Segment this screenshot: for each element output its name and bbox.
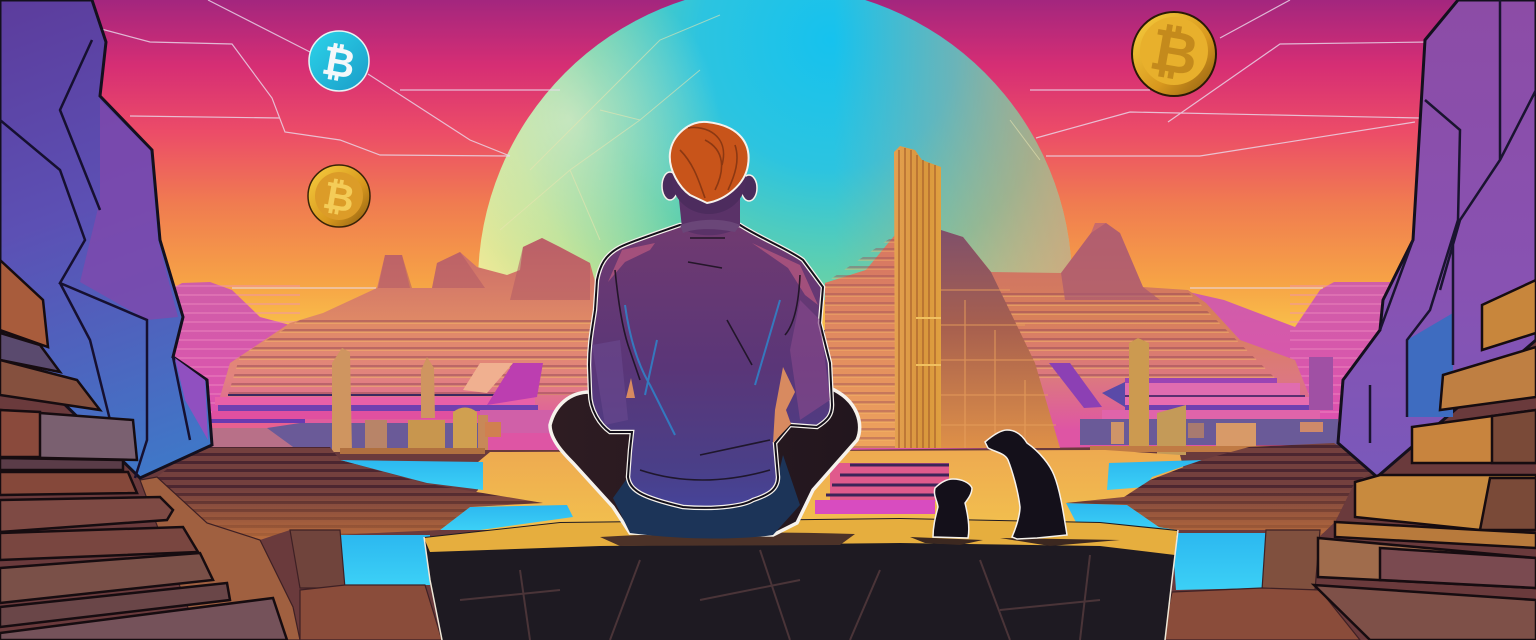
- purple rock wall left: [0, 0, 212, 478]
- coin: cyan bitcoin: [309, 31, 369, 91]
- figure seated from behind: [550, 122, 860, 539]
- stone stairs left: [0, 260, 287, 640]
- small dog silhouette: [933, 479, 972, 538]
- arm gaps: [626, 367, 795, 443]
- network lines: [90, 0, 1430, 288]
- collar: [680, 220, 740, 233]
- seat: [613, 455, 800, 539]
- side terraces: [157, 443, 1377, 540]
- coin: large gold bitcoin: [1132, 12, 1216, 96]
- stone stairs right: [1314, 280, 1536, 640]
- lower rocks: [140, 477, 1360, 640]
- left arm shading: [592, 340, 628, 425]
- large dog silhouette: [985, 430, 1067, 539]
- left obelisks and small towers: [332, 348, 501, 454]
- hair: [670, 122, 749, 203]
- sphere: [478, 0, 1071, 300]
- torso and arms: [589, 225, 832, 508]
- water pools: [333, 460, 1266, 590]
- right arm shading: [790, 300, 830, 420]
- sky: [0, 0, 1536, 330]
- neck: [678, 190, 740, 235]
- central pink steps: [815, 463, 949, 514]
- shoulder highlights: [608, 243, 818, 305]
- ears: [662, 172, 678, 200]
- coin: cyan bitcoin: ₿: [319, 37, 359, 88]
- back creases: [615, 238, 800, 480]
- coin: small gold bitcoin: ₿: [320, 173, 358, 221]
- head: [672, 146, 746, 214]
- right pyramid city: [825, 223, 1338, 450]
- central tower: [894, 146, 941, 448]
- legs: [550, 388, 860, 535]
- cliff ledge: [424, 518, 1178, 640]
- left pyramid city: [205, 238, 600, 452]
- distant mountains: [170, 282, 1400, 445]
- purple rock wall right: [1338, 0, 1536, 477]
- right obelisks and small towers: [1090, 338, 1323, 455]
- coin: small gold bitcoin: [308, 165, 370, 227]
- coin: large gold bitcoin: ₿: [1145, 14, 1204, 90]
- sand flat: [440, 450, 1200, 530]
